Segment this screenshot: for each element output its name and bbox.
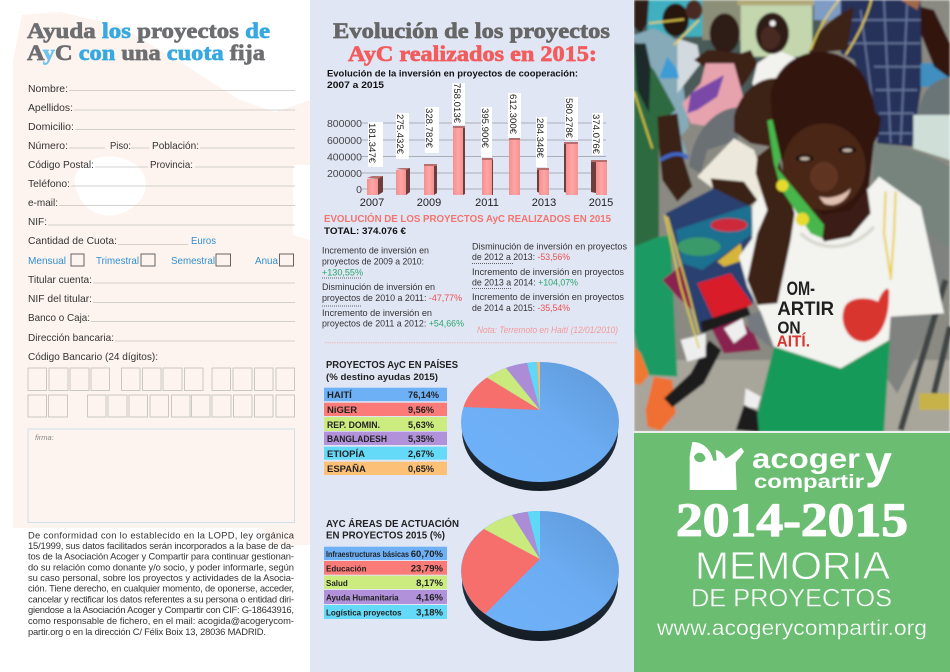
legal text: como responsable de fichero, en el mail: acogida@acogerycom- xyxy=(28,615,294,626)
legend table: countries: 0,65% xyxy=(408,464,435,475)
chart subtitle: Evolución de la inversión en proyectos de cooperación: xyxy=(327,68,578,80)
logo: Acoger y Compartir: acoger xyxy=(752,443,860,474)
heading: form title: Ayuda los proyectos de xyxy=(27,18,270,43)
form fields: personal data xyxy=(28,83,295,228)
form fields: personal data: Piso: xyxy=(110,140,131,152)
text block: yearly changes right: de 2013 a 2014: +104,07% xyxy=(472,277,578,288)
heading: projects by country: (% destino ayudas 2015) xyxy=(326,372,438,383)
legend table: action areas: Ayuda Humanitaria xyxy=(326,594,399,602)
legend table: action areas xyxy=(324,547,447,619)
legend table: action areas: Educación xyxy=(326,564,367,574)
form fields: quota amount and frequency: Trimestral xyxy=(96,255,139,267)
green toy phone xyxy=(767,119,824,238)
panel: donation form xyxy=(0,0,310,672)
bar chart: investment 2007-2015: 2011 xyxy=(475,197,499,209)
form fields: personal data: e-mail: xyxy=(28,197,58,209)
legend table: countries: ESPAÑA xyxy=(327,464,366,475)
form fields: personal data: Población: xyxy=(152,140,199,152)
form fields: personal data: Apellidos: xyxy=(28,102,73,114)
child in profile xyxy=(697,138,767,208)
heading: memoria: MEMORIA xyxy=(695,545,890,588)
bar chart: investment 2007-2015: 600000 xyxy=(327,135,362,147)
bar chart: investment 2007-2015: 284.348€ xyxy=(534,118,545,159)
legal text: De conformidad con lo establecido en la LOPD, ley orgánica xyxy=(28,529,295,540)
heading: years: 2014-2015 xyxy=(676,494,908,547)
legend table: countries: ETIOPÍA xyxy=(327,449,365,460)
website: www.acogerycompartir.org xyxy=(656,616,927,640)
form fields: bank data: Titular cuenta: xyxy=(28,274,92,286)
form fields: quota amount and frequency: Semestral xyxy=(171,255,215,267)
bar chart: investment 2007-2015: 400000 xyxy=(327,152,362,164)
heading: action areas xyxy=(326,517,459,542)
gray chairs xyxy=(689,107,741,173)
legend table: action areas: 8,17% xyxy=(416,578,444,589)
form fields: quota amount and frequency: Anua xyxy=(255,255,278,267)
text block: yearly changes left: Incremento de inversión en xyxy=(322,244,429,255)
heading: form title: AyC con una cuota fija xyxy=(27,40,265,65)
legend table: countries: 9,56% xyxy=(408,405,435,416)
bar chart: investment 2007-2015: 580.278€ xyxy=(563,98,574,139)
legend table: action areas: 60,70% xyxy=(411,549,444,560)
form fields: personal data: Código Postal: xyxy=(28,159,94,171)
text block: yearly changes left: proyectos de 2010 a 2011: -47,77% xyxy=(322,292,462,303)
text block: yearly changes right: de 2014 a 2015: -35,54% xyxy=(472,302,570,313)
bar chart: investment 2007-2015: 2013 xyxy=(532,197,556,209)
text block: yearly changes right xyxy=(472,240,627,313)
text block: yearly changes left: Incremento de inversión en xyxy=(322,307,432,318)
legend table: countries: 2,67% xyxy=(408,449,435,460)
legend table: action areas: Salud xyxy=(326,579,348,588)
legend table: action areas: Infraestructuras básicas xyxy=(326,550,409,559)
bar chart: investment 2007-2015: 0 xyxy=(356,184,362,196)
pie chart: action areas xyxy=(461,511,619,641)
drawstring bag with cars xyxy=(666,188,753,333)
bar chart: investment 2007-2015: 200000 xyxy=(327,168,362,180)
chart subtitle xyxy=(327,68,578,91)
logo: Acoger y Compartir: compartir xyxy=(754,471,864,493)
legal text: cancelar y rectificar los datos referentes a su persona o entidad diri- xyxy=(28,593,294,604)
bar chart: investment 2007-2015: 2007 xyxy=(360,197,384,209)
signature box: firma: xyxy=(35,433,54,442)
form fields: bank data: NIF del titular: xyxy=(28,293,92,305)
form fields: bank data xyxy=(28,274,295,363)
logo: Acoger y Compartir xyxy=(690,436,892,493)
text block: yearly changes right: Incremento de inversión en proyectos xyxy=(472,266,624,277)
form fields: bank data: Código Bancario (24 dígitos): xyxy=(28,351,158,363)
form fields: personal data: Provincia: xyxy=(150,159,193,171)
legend table: countries: BANGLADESH xyxy=(327,434,387,445)
t-shirt lettering: AITÍ. xyxy=(777,334,810,351)
legal text: do su relación como donante y/o socio, y poder informarle, según xyxy=(28,561,294,572)
legal text: tos de la Asociación Acoger y Compartir para continuar gestionan- xyxy=(28,551,294,562)
note: Haiti earthquake: Nota: Terremoto en Haití (12/01/2010) xyxy=(477,325,618,336)
form fields: personal data: Domicilio: xyxy=(28,121,74,133)
boy head xyxy=(771,52,881,215)
boy arm xyxy=(747,143,795,305)
text block: yearly changes left: proyectos de 2009 a 2010: xyxy=(322,255,424,266)
t-shirt lettering: OM- xyxy=(787,279,815,300)
heading: evolution title xyxy=(333,18,610,66)
form fields: quota amount and frequency xyxy=(28,235,294,267)
heart on t-shirt xyxy=(843,289,889,342)
heading: de proyectos: DE PROYECTOS xyxy=(691,585,892,613)
legend table: countries: NiGER xyxy=(327,405,357,416)
heading: action areas: EN PROYECTOS 2015 (%) xyxy=(326,530,445,542)
legal text: 15/1999, sus datos facilitados serán incorporados a la base de da- xyxy=(28,540,294,551)
bar chart: investment 2007-2015: 395.900€ xyxy=(479,108,490,149)
plaid shirt xyxy=(841,0,922,147)
icon: shopping bag xyxy=(690,442,744,490)
logo: Acoger y Compartir: y xyxy=(865,436,892,488)
legend table: action areas: 4,16% xyxy=(416,592,444,604)
bar chart: investment 2007-2015: 800000 xyxy=(327,118,362,130)
legal text: partir.org o en la dirección C/ Félix Boix 13, 28036 MADRID. xyxy=(28,626,266,637)
form fields: personal data: Nombre: xyxy=(28,83,68,95)
legend table: countries: 5,35% xyxy=(408,434,435,445)
heading: evolution title: AyC realizados en 2015: xyxy=(348,41,597,66)
form fields: personal data: Teléfono: xyxy=(28,178,70,190)
text block: yearly changes right: de 2012 a 2013: -53,56% xyxy=(472,251,570,262)
boy shorts xyxy=(757,340,890,432)
heading: evolution title: Evolución de los proyectos xyxy=(333,18,610,43)
heading: evolution total xyxy=(324,212,611,237)
text block: yearly changes left: Disminución de inversión en xyxy=(322,281,435,292)
panel: cover xyxy=(634,0,950,672)
panel: project evolution xyxy=(310,0,634,672)
legend table: action areas: 23,79% xyxy=(411,564,444,574)
form fields: quota amount and frequency: Euros xyxy=(191,235,216,247)
text block: yearly changes right: Disminución de inversión en proyectos xyxy=(472,240,627,251)
legend table: countries: 76,14% xyxy=(408,390,440,401)
legal text: ción. Tiene derecho, en cualquier momento, de oponerse, acceder, xyxy=(28,583,294,594)
heading: form title xyxy=(27,18,270,65)
bar chart: investment 2007-2015: 328.782€ xyxy=(423,108,434,149)
text block: yearly changes right: Incremento de inversión en proyectos xyxy=(472,291,624,302)
legend table: countries: HAITÍ xyxy=(327,390,352,401)
legend table: countries: REP. DOMIN. xyxy=(327,420,380,431)
form fields: personal data: Número: xyxy=(28,140,68,152)
form fields: personal data: NIF: xyxy=(28,216,47,228)
legal text: giendose a la Asociación Acoger y Compartir con CIF: G-18643916, xyxy=(28,604,294,615)
bar chart: investment 2007-2015: 2015 xyxy=(589,197,613,209)
t-shirt lettering: ON xyxy=(777,317,801,337)
bank code digit boxes xyxy=(28,368,294,417)
text block: yearly changes left: +130,55% xyxy=(322,267,363,278)
form fields: bank data: Dirección bancaria: xyxy=(28,332,114,344)
t-shirt lettering xyxy=(777,279,834,351)
legal text: su caso personal, sobre los proyectos y actividades de la Asocia- xyxy=(28,572,294,583)
shoes and legs xyxy=(634,347,649,385)
watermark shape xyxy=(13,12,310,545)
bar chart: investment 2007-2015: 758.013€ xyxy=(451,83,462,124)
bar chart: investment 2007-2015 xyxy=(327,83,613,209)
text block: yearly changes left xyxy=(322,244,464,329)
legend table: countries: 5,63% xyxy=(408,420,435,431)
photo: boy with toy phone xyxy=(634,0,950,432)
form fields: bank data: Banco o Caja: xyxy=(28,312,90,324)
bar chart: investment 2007-2015: 612.300€ xyxy=(507,94,518,135)
heading: action areas: AYC ÁREAS DE ACTUACIÓN xyxy=(326,517,459,530)
green child xyxy=(634,50,676,250)
legend table: action areas: 3,18% xyxy=(416,608,444,618)
pie chart: countries xyxy=(461,362,619,491)
heading: evolution total: TOTAL: 374.076 € xyxy=(324,226,407,237)
seat under boy xyxy=(747,310,772,348)
green cover block xyxy=(634,433,950,672)
heading: evolution total: EVOLUCIÓN DE LOS PROYECTOS AyC REALIZADOS EN 2015 xyxy=(324,212,611,225)
heading: projects by country: PROYECTOS AyC EN PAÍSES xyxy=(326,358,458,371)
form fields: quota amount and frequency: Mensual xyxy=(28,255,66,267)
bar chart: investment 2007-2015: 374.076€ xyxy=(590,114,601,155)
bar chart: investment 2007-2015: 181.347€ xyxy=(366,123,377,164)
bar chart: investment 2007-2015: 2009 xyxy=(417,197,441,209)
seated children behind xyxy=(634,0,649,33)
form fields: quota amount and frequency: Cantidad de Cuota: xyxy=(28,235,117,247)
bar chart: investment 2007-2015: 275.432€ xyxy=(394,114,405,155)
legend table: action areas: Logística proyectos xyxy=(326,608,402,618)
t-shirt lettering: ARTIR xyxy=(777,299,834,320)
heading: projects by country xyxy=(326,358,458,383)
boy t-shirt xyxy=(739,177,944,368)
signature box xyxy=(28,429,294,522)
chart subtitle: 2007 a 2015 xyxy=(327,80,385,91)
text block: yearly changes left: proyectos de 2011 a 2012: +54,66% xyxy=(322,318,464,329)
legend table: countries xyxy=(324,388,447,475)
legal text xyxy=(28,529,295,637)
